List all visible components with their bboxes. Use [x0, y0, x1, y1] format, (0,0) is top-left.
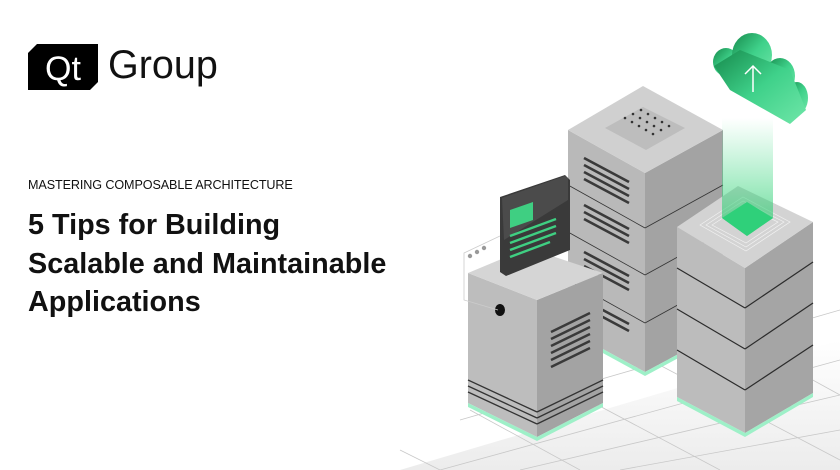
middle tower	[568, 86, 723, 376]
title: Scalable and Maintainable	[28, 248, 386, 280]
logo mark: Qt box	[28, 44, 98, 90]
small server box	[468, 248, 603, 441]
connector line with dots	[464, 236, 500, 310]
floor grid	[400, 310, 840, 470]
title	[28, 209, 386, 318]
logo	[28, 43, 218, 90]
green beam	[722, 118, 773, 236]
title: Applications	[28, 286, 201, 318]
right tower	[677, 186, 813, 437]
subtitle: MASTERING COMPOSABLE ARCHITECTURE	[28, 178, 293, 192]
title: 5 Tips for Building	[28, 209, 280, 241]
logo text: Group	[108, 43, 218, 87]
monitor	[500, 175, 570, 276]
icon: cloud upload	[713, 33, 808, 124]
logo mark: Qt box: Qt	[45, 50, 81, 88]
